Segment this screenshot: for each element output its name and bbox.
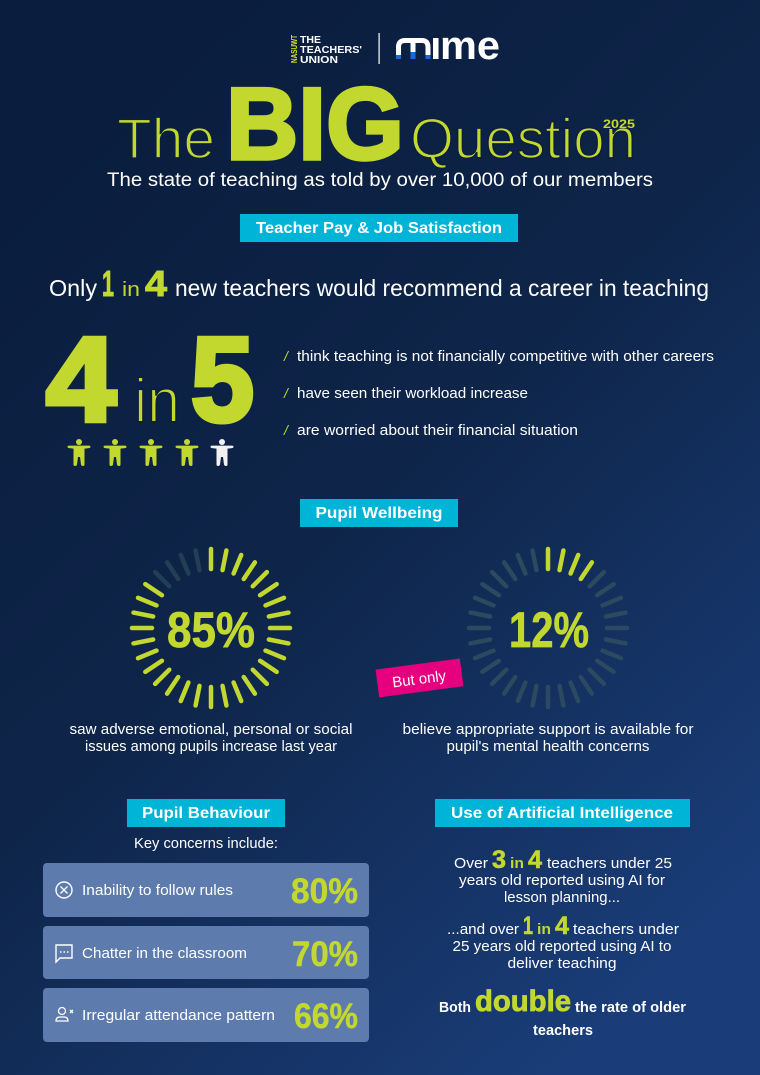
logo: NASUWT The Teachers' Union: THE bbox=[300, 34, 321, 46]
text: 3 in 4 teachers: 3 bbox=[492, 846, 506, 874]
list: 4 in 5 findings: / bbox=[283, 348, 290, 364]
text: 1 in 4 teachers bbox=[447, 912, 679, 972]
icon: circled cross bbox=[56, 882, 72, 898]
text: 1 in 4 teachers: teachers under bbox=[573, 922, 679, 938]
text: 1 in 4 teachers: deliver teaching bbox=[508, 956, 616, 972]
list: 4 in 5 findings: / bbox=[283, 385, 290, 401]
icon: person with cross bbox=[56, 1008, 73, 1021]
text: 1 in 4 teachers: 1 bbox=[523, 912, 533, 940]
list: 4 in 5 findings: are worried about their financial situation bbox=[297, 423, 578, 439]
logo: NASUWT The Teachers' Union: TEACHERS' bbox=[300, 44, 362, 56]
statement: 1 in 4 new teachers: 1 bbox=[102, 263, 114, 304]
callout: But only bbox=[376, 659, 463, 697]
heading: Pupil Behaviour: Pupil Behaviour bbox=[142, 805, 270, 822]
card: Chatter in the classroom bbox=[43, 926, 369, 979]
logo: mime: me bbox=[440, 24, 500, 68]
title: 2025 bbox=[603, 117, 635, 131]
heading: Use of Artificial Intelligence bbox=[435, 799, 690, 827]
card: Irregular attendance pattern: Irregular attendance pattern bbox=[82, 1007, 275, 1024]
subtitle: The state of teaching as told by over 10,000 of our members bbox=[107, 170, 653, 191]
text: Both double the rate bbox=[439, 985, 686, 1039]
logo: NASUWT The Teachers' Union bbox=[290, 34, 362, 66]
text: 1 in 4 teachers: in bbox=[537, 921, 551, 938]
stat: 4 in 5: 5 bbox=[191, 313, 254, 447]
title: The bbox=[117, 107, 215, 171]
card: Chatter in the classroom: 70% bbox=[292, 935, 358, 974]
donut: 12% bbox=[469, 549, 627, 707]
text: 3 in 4 teachers: in bbox=[510, 855, 524, 872]
caption: 85% bbox=[70, 722, 352, 755]
text: Both double the rate: Both bbox=[439, 999, 471, 1016]
card: Irregular attendance pattern: 66% bbox=[294, 997, 358, 1036]
stat: 4 in 5: in bbox=[134, 367, 180, 436]
text: 3 in 4 teachers bbox=[454, 846, 672, 906]
list: 4 in 5 findings: have seen their workload increase bbox=[297, 386, 528, 402]
heading: Use of Artificial Intelligence: Use of Artificial Intelligence bbox=[451, 805, 673, 822]
donut: 85% bbox=[132, 549, 290, 707]
donut: 85%: 85% bbox=[167, 602, 255, 658]
caption: 12%: believe appropriate support is available for bbox=[402, 722, 694, 738]
text: 1 in 4 teachers: 4 bbox=[555, 912, 569, 940]
header logos bbox=[290, 24, 500, 68]
statement: 1 in 4 new teachers: in bbox=[122, 279, 140, 301]
stat: 4 in 5: 4 bbox=[46, 313, 116, 447]
heading: Pupil Wellbeing: Pupil Wellbeing bbox=[316, 505, 442, 522]
title bbox=[117, 67, 636, 181]
card: Irregular attendance pattern bbox=[43, 988, 369, 1042]
statement: 1 in 4 new teachers: Only bbox=[49, 275, 98, 301]
card: Inability to follow rules: 80% bbox=[291, 872, 358, 911]
text: 3 in 4 teachers: years old reported using AI for bbox=[459, 873, 665, 889]
card: Inability to follow rules: Inability to follow rules bbox=[82, 882, 233, 899]
logo: NASUWT The Teachers' Union: NASUWT bbox=[290, 35, 299, 63]
text: 3 in 4 teachers: Over bbox=[454, 856, 488, 872]
donut: 12%: 12% bbox=[509, 602, 589, 658]
icon: speech bubble bbox=[56, 945, 72, 962]
card: Chatter in the classroom: Chatter in the classroom bbox=[82, 945, 247, 962]
card: Inability to follow rules bbox=[43, 863, 369, 917]
logo: mime bbox=[396, 24, 500, 68]
statement: 1 in 4 new teachers: 4 bbox=[145, 263, 167, 304]
callout: But only: But only bbox=[391, 667, 448, 691]
caption: 12%: pupil's mental health concerns bbox=[446, 739, 650, 755]
text: Both double the rate: double bbox=[475, 985, 571, 1018]
text: 1 in 4 teachers: ...and over bbox=[447, 922, 519, 938]
heading: Pupil Behaviour bbox=[127, 799, 285, 827]
text: Both double the rate: teachers bbox=[533, 1022, 593, 1039]
stat: 4 in 5 bbox=[46, 313, 254, 447]
statement: 1 in 4 new teachers: new teachers would recommend a career in teaching bbox=[175, 275, 709, 301]
list: 4 in 5 findings bbox=[283, 348, 714, 439]
caption: 85%: saw adverse emotional, personal or social bbox=[70, 722, 352, 738]
caption: 12% bbox=[402, 722, 694, 755]
text: Both double the rate: the rate of older bbox=[575, 999, 686, 1016]
list: 4 in 5 findings: think teaching is not financially competitive with other careers bbox=[297, 349, 714, 365]
text: Key concerns include: Key concerns include: bbox=[134, 835, 278, 852]
list: 4 in 5 findings: / bbox=[283, 422, 290, 438]
heading: Teacher Pay & Job Satisfaction: Teacher Pay & Job Satisfaction bbox=[256, 220, 502, 237]
text: 3 in 4 teachers: 4 bbox=[528, 846, 542, 874]
title: Question bbox=[410, 107, 636, 171]
text: 3 in 4 teachers: teachers under 25 bbox=[547, 856, 672, 872]
statement: 1 in 4 new teachers bbox=[49, 263, 709, 304]
heading: Pupil Wellbeing bbox=[300, 499, 458, 527]
caption: 85%: issues among pupils increase last year bbox=[85, 739, 337, 755]
icon row: 4 of 5 people bbox=[68, 439, 234, 466]
text: 3 in 4 teachers: lesson planning... bbox=[504, 890, 620, 906]
logo: NASUWT The Teachers' Union: UNION bbox=[300, 54, 338, 66]
text: 1 in 4 teachers: 25 years old reported using AI to bbox=[452, 939, 672, 955]
title: BIG bbox=[226, 67, 404, 181]
heading: Teacher Pay & Job Satisfaction bbox=[240, 214, 518, 242]
